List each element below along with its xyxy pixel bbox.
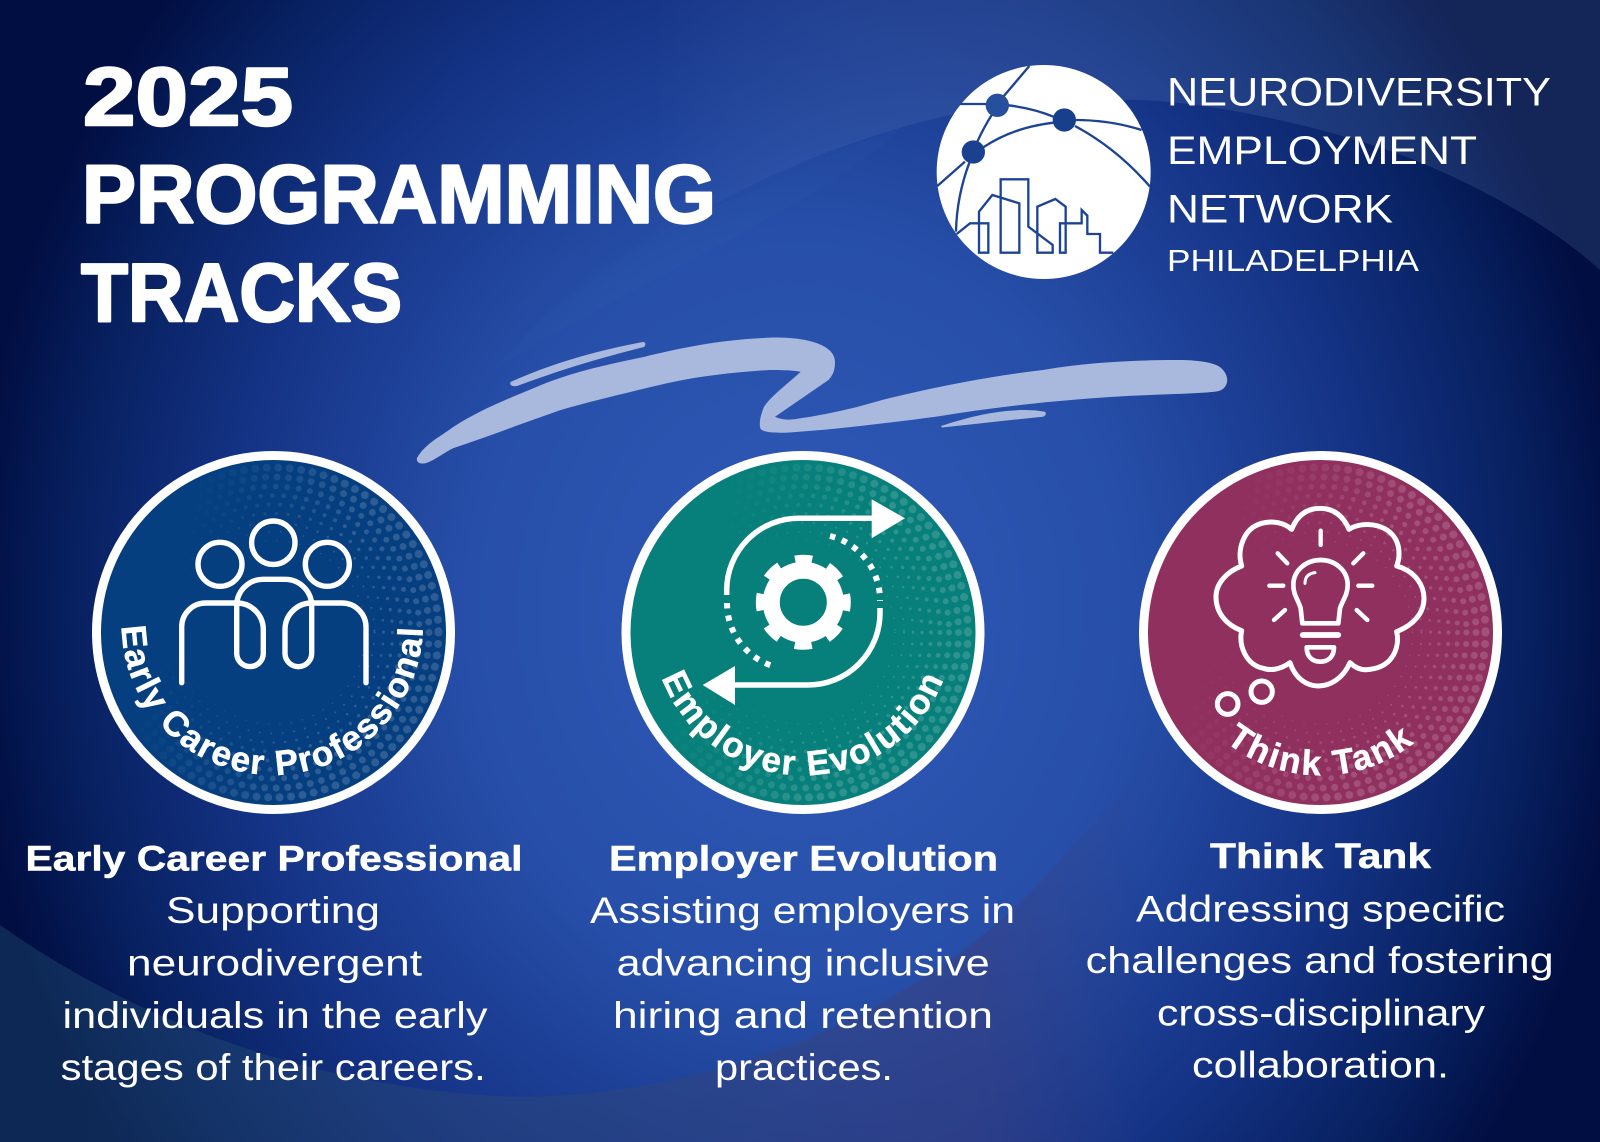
curved label: Think Tank	[1231, 722, 1414, 776]
logo wordmark: EMPLOYMENT	[1167, 129, 1477, 173]
text block: early career professional	[26, 840, 522, 1088]
text block: employer evolution: Employer Evolution	[609, 840, 998, 879]
title: PROGRAMMING	[82, 148, 716, 240]
logo: globe and city	[937, 65, 1151, 279]
logo wordmark	[1167, 70, 1551, 278]
text block: think tank: Addressing specific	[1136, 889, 1505, 930]
text block: think tank: Think Tank	[1210, 837, 1432, 876]
text block: employer evolution: practices.	[715, 1047, 893, 1088]
text block: early career professional: neurodivergent	[127, 943, 423, 984]
text block: early career professional: Supporting	[166, 890, 380, 931]
halftone dots	[694, 464, 972, 802]
logo wordmark: PHILADELPHIA	[1167, 244, 1420, 278]
halftone dots	[1218, 464, 1490, 802]
logo wordmark: NEURODIVERSITY	[1167, 70, 1551, 114]
text block: employer evolution: Assisting employers in	[590, 890, 1015, 931]
text block: early career professional: stages of their careers.	[61, 1047, 486, 1088]
curved label: Early Career Professional	[121, 626, 423, 776]
text block: think tank	[1086, 837, 1554, 1086]
text block: early career professional: Early Career Professional	[26, 840, 522, 879]
text block: think tank: challenges and fostering	[1086, 940, 1554, 981]
text block: employer evolution: advancing inclusive	[617, 943, 990, 984]
brush stroke decoration	[417, 338, 1227, 463]
title: TRACKS	[81, 246, 402, 339]
panel: employer evolution badge	[622, 451, 984, 814]
icon: gear and cycle arrows	[703, 499, 905, 705]
text block: employer evolution	[590, 840, 1015, 1088]
logo wordmark: NETWORK	[1167, 188, 1393, 232]
panel: early career professional badge	[92, 451, 455, 814]
text block: early career professional: individuals in the early	[62, 995, 488, 1036]
icon: light bulb in thought cloud	[1216, 508, 1424, 714]
title: 2025	[83, 50, 293, 143]
curved label: Employer Evolution	[662, 669, 944, 776]
title	[81, 50, 716, 339]
icon: three people	[182, 521, 366, 683]
text block: think tank: collaboration.	[1192, 1045, 1449, 1086]
text block: think tank: cross-disciplinary	[1157, 993, 1486, 1034]
panel: think tank badge	[1139, 451, 1502, 814]
text block: employer evolution: hiring and retention	[613, 995, 993, 1036]
halftone dots	[164, 464, 442, 802]
